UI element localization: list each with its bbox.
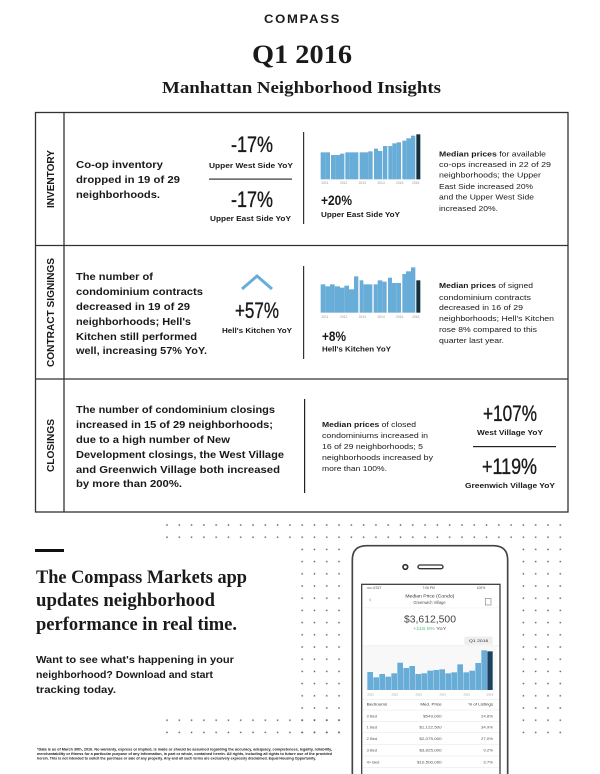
- promo heading: updates neighborhood: [36, 591, 216, 611]
- bar chart: contract signings median price: 2013: [359, 315, 366, 319]
- disclaimer: merchantability or fitness for a particular purpose of any information, in part or whole, contained herein. All rights, including all rights to future use of the provided: [37, 752, 332, 756]
- status bar: [367, 586, 485, 590]
- closings text block: The number of condominium closings: [76, 405, 275, 416]
- closings side label: CLOSINGS: [46, 419, 57, 472]
- phone data table: 3 Bed: [367, 748, 377, 753]
- closings text block: and Greenwich Village both increased: [76, 465, 280, 476]
- median prices note: closings: [322, 420, 433, 473]
- phone bar chart: 2016: [487, 692, 494, 696]
- bar chart: inventory median price: 2015: [396, 181, 404, 185]
- promo text: tracking today.: [36, 685, 116, 696]
- screen header: Greenwich Village: [413, 600, 446, 605]
- phone screen: [362, 584, 500, 774]
- promo heading: performance in real time.: [36, 615, 237, 635]
- headline price: [404, 614, 456, 631]
- status bar: 100%: [477, 586, 485, 590]
- bar chart: inventory median price: 2012: [340, 181, 348, 185]
- median prices note: closings: condominiums increased in: [322, 431, 428, 440]
- stat: Upper West Side: [209, 132, 293, 170]
- bar chart: inventory median price: 2016: [412, 181, 420, 185]
- stat: Greenwich Village: [465, 454, 555, 490]
- stat: Hell's Kitchen price: Hell's Kitchen YoY: [322, 346, 391, 354]
- median prices note: inventory: [439, 150, 551, 213]
- closings text block: Development closings, the West Village: [76, 450, 284, 461]
- subtitle: Manhattan Neighborhood Insights: [162, 78, 441, 97]
- icon: up chevron: [242, 276, 272, 289]
- closings text block: increased in 15 of 29 neighborhoods;: [76, 420, 273, 431]
- median prices note: contract signings: Median prices of signed: [439, 281, 533, 290]
- status bar: ••••• AT&T: [367, 586, 381, 590]
- phone bar chart: 2013: [415, 692, 422, 696]
- panel: inventory: [46, 132, 551, 224]
- inventory text block: neighborhoods.: [76, 190, 160, 201]
- median prices note: closings: Median prices of closed: [322, 420, 416, 429]
- headline price: +118.9% YoY: [413, 626, 446, 631]
- phone data table: 27.0%: [481, 736, 493, 741]
- phone mockup: [352, 546, 508, 774]
- median prices note: contract signings: rose 8% compared to this: [439, 325, 537, 334]
- contract signings text block: condominium contracts: [76, 287, 203, 298]
- bar chart: contract signings median price: 2014: [377, 315, 385, 319]
- promo text: neighborhood? Download and start: [36, 670, 214, 681]
- phone bar chart: 2015: [463, 692, 470, 696]
- period tag: [464, 637, 493, 645]
- dot pattern background: [165, 523, 563, 737]
- stat: Upper East Side: [210, 187, 291, 223]
- logo: Compass: COMPASS: [264, 14, 341, 26]
- phone data table: 24.8%: [481, 713, 493, 718]
- closings text block: due to a high number of New: [76, 435, 231, 446]
- stat: Hell's Kitchen price: [322, 328, 391, 354]
- screen header: [369, 593, 491, 605]
- median prices note: contract signings: decreased in 16 of 29: [439, 303, 523, 312]
- stat: West Village: +107%: [483, 401, 537, 426]
- stat: Upper East Side price: [321, 192, 400, 219]
- median prices note: inventory: East Side increased 20%: [439, 182, 534, 191]
- phone body: [352, 546, 508, 774]
- phone data table: % of Listings: [468, 701, 493, 706]
- median prices note: inventory: co-ops increased in 22 of 29: [439, 160, 551, 169]
- contract signings text block: The number of: [76, 272, 154, 283]
- stat: Hell's Kitchen: [222, 298, 292, 335]
- closings text block: [76, 405, 284, 490]
- phone data table: $549,000: [423, 713, 443, 718]
- bar chart: contract signings median price: 2011: [321, 315, 329, 319]
- bar chart: contract signings median price: 2012: [340, 315, 348, 319]
- phone data table: $3,825,000: [419, 748, 443, 753]
- contract signings text block: well, increasing 57% YoY.: [75, 346, 207, 357]
- bar chart: inventory median price: 2013: [359, 181, 366, 185]
- stat: Upper East Side: Upper East Side YoY: [210, 216, 291, 223]
- headline price: $3,612,500: [404, 614, 456, 625]
- inventory text block: dropped in 19 of 29: [76, 175, 180, 186]
- phone data table: 0 Bed: [367, 713, 377, 718]
- screen header: ‹: [369, 597, 371, 604]
- stat: Upper East Side price: +20%: [321, 192, 352, 208]
- phone bar chart: 2012: [391, 692, 398, 696]
- stat: Hell's Kitchen: Hell's Kitchen YoY: [222, 328, 292, 335]
- status bar: 7:06 PM: [422, 586, 435, 590]
- phone data table: 34.9%: [481, 725, 493, 730]
- phone data table: Bedrooms: [367, 701, 387, 706]
- phone bar chart: 2011: [367, 692, 374, 696]
- stat: West Village: West Village YoY: [477, 430, 543, 437]
- median prices note: inventory: and the Upper West Side: [439, 192, 534, 202]
- phone data table: 4+ Bed: [367, 759, 379, 764]
- disclaimer: *Data is as of March 30th, 2016. No warranty, express or implied, is made or should be assumed regarding the accuracy, adequacy, completeness, legality, reliability,: [37, 748, 332, 752]
- inventory side label: INVENTORY: [46, 150, 57, 208]
- contract signings text block: neighborhoods; Hell's: [76, 317, 191, 328]
- bar chart: inventory median price: 2011: [321, 181, 329, 185]
- bar chart: contract signings median price: [321, 267, 420, 319]
- stat: West Village: [477, 401, 543, 437]
- accent bar: [35, 549, 64, 552]
- stat: Greenwich Village: Greenwich Village YoY: [465, 483, 555, 490]
- phone data table: $1,122,500: [419, 725, 443, 730]
- disclaimer: [37, 748, 332, 760]
- panel: closings: [46, 399, 556, 493]
- disclaimer: herein. This is not intended to solicit the purchase or sale of any property. Any and all such terms are exclusively expressly disclaimed. Equal Housing Opportunity.: [37, 756, 316, 760]
- phone bar chart: [363, 647, 497, 696]
- stat: Upper East Side price: Upper East Side YoY: [321, 212, 400, 219]
- closings text block: by more than 200%.: [76, 479, 182, 490]
- median prices note: contract signings: neighborhoods; Hell's Kitchen: [439, 314, 554, 323]
- phone data table: $10,500,000: [417, 759, 443, 764]
- phone data table: 2 Bed: [367, 736, 377, 741]
- phone data table: 9.2%: [483, 748, 493, 753]
- median prices note: contract signings: [439, 281, 554, 345]
- contract signings side label: CONTRACT SIGNINGS: [46, 258, 57, 367]
- stat: Upper East Side: -17%: [231, 187, 273, 212]
- period tag: Q1 2016: [469, 638, 489, 643]
- promo text: Want to see what's happening in your: [36, 655, 234, 666]
- table frame: [35, 112, 568, 512]
- bar chart: inventory median price: 2014: [377, 181, 385, 185]
- title: Q1 2016: [252, 40, 352, 69]
- stat: Hell's Kitchen: +57%: [235, 298, 279, 323]
- bar chart: contract signings median price: 2016: [412, 315, 420, 319]
- promo text: [36, 655, 234, 696]
- promo heading: [36, 568, 247, 635]
- promo heading: The Compass Markets app: [36, 568, 247, 588]
- stat: Hell's Kitchen price: +8%: [322, 328, 346, 344]
- phone data table: $2,075,000: [419, 736, 443, 741]
- contract signings text block: Kitchen still performed: [76, 332, 197, 343]
- panel: contract signings: [46, 258, 554, 367]
- phone camera and speaker: [403, 565, 443, 569]
- contract signings text block: [75, 272, 207, 357]
- inventory text block: [76, 160, 180, 201]
- inventory text block: Co-op inventory: [76, 160, 163, 171]
- median prices note: closings: neighborhoods increased by: [322, 453, 433, 462]
- stat: Greenwich Village: +119%: [482, 454, 537, 479]
- median prices note: contract signings: quarter last year.: [439, 336, 504, 345]
- contract signings text block: decreased in 19 of 29: [76, 302, 190, 313]
- bar chart: inventory median price: [321, 134, 420, 185]
- median prices note: inventory: neighborhoods; the Upper: [439, 170, 542, 180]
- phone data table: 3.7%: [483, 759, 493, 764]
- bar chart: contract signings median price: 2015: [396, 315, 404, 319]
- median prices note: closings: more than 100%.: [322, 464, 387, 473]
- median prices note: contract signings: condominium contracts: [439, 293, 532, 302]
- phone data table: 1 Bed: [367, 725, 377, 730]
- phone data table: [363, 699, 499, 767]
- median prices note: inventory: increased 20%.: [439, 204, 498, 213]
- median prices note: inventory: Median prices for available: [439, 150, 546, 158]
- stat: Upper West Side: Upper West Side YoY: [209, 163, 293, 170]
- screen header: Median Price (Condo): [405, 593, 455, 598]
- median prices note: closings: 16 of 29 neighborhoods; 5: [322, 442, 423, 451]
- phone data table: Med. Price: [420, 701, 443, 706]
- stat: Upper West Side: -17%: [231, 132, 273, 157]
- phone bar chart: 2014: [439, 692, 446, 696]
